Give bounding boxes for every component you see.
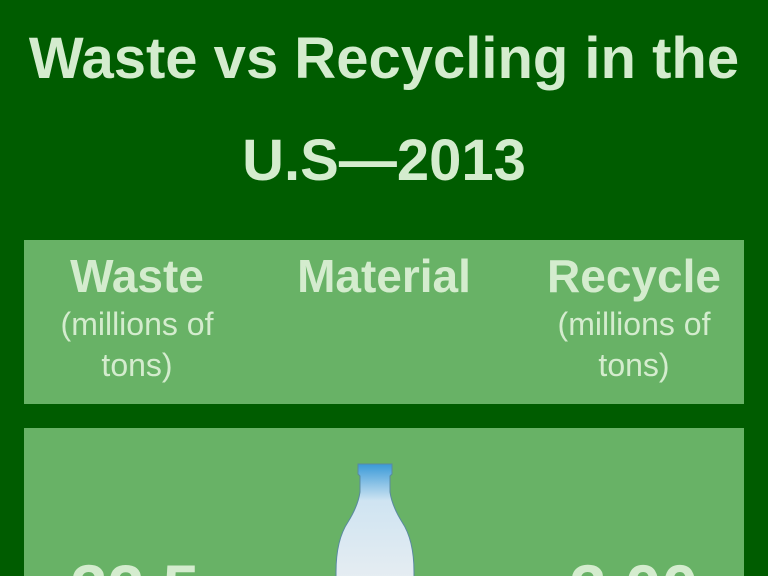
heading: waste (61, 250, 214, 383)
panel: plastic (24, 428, 744, 576)
heading: material: Material (297, 250, 471, 302)
heading: recycle: (millions of tons) (558, 306, 710, 383)
heading: waste: Waste (70, 250, 204, 302)
title: Waste vs Recycling in the (29, 26, 739, 91)
heading: recycle: Recycle (547, 250, 721, 302)
title (28, 26, 739, 193)
heading: recycle (547, 250, 721, 383)
heading: waste: (millions of tons) (61, 306, 213, 383)
title: U.S—2013 (242, 128, 526, 193)
panel: header (24, 240, 744, 404)
icon: bottle (336, 464, 414, 576)
